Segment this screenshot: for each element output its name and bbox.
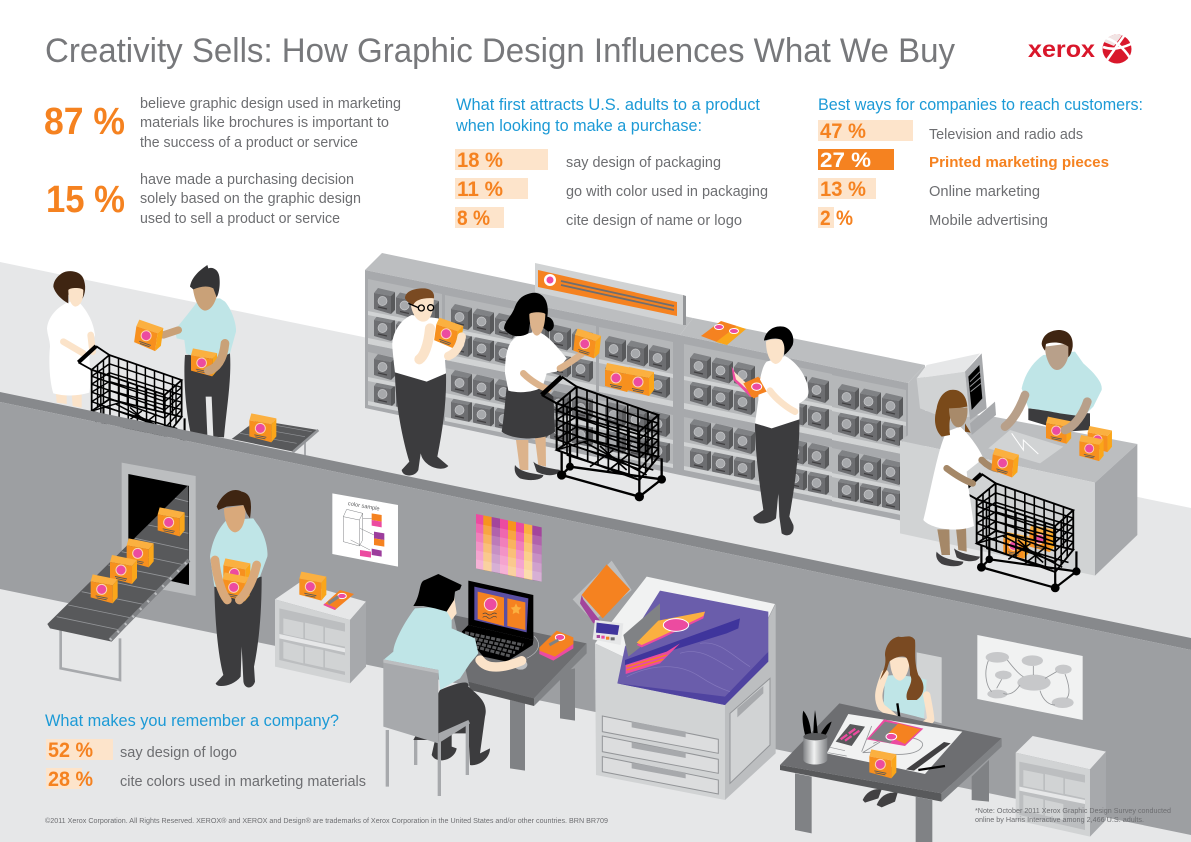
panel: best ways to reach customers: Television and radio ads [929,127,1083,143]
scene: shelf shoppers [392,288,768,501]
scene: production line [47,463,398,687]
panel: what first attracts: say design of packaging [566,155,721,171]
cabinet with box [275,572,366,683]
person: woman with black hair [502,293,602,480]
person: designer at laptop [383,574,522,765]
stat: 15 percent: solely based on the graphic design [140,191,361,207]
panel: best ways to reach customers: 27 % [820,149,871,172]
checkout scene [743,326,1137,592]
person: woman in white [47,271,95,408]
panel: best ways to reach customers: 47 % [820,120,866,143]
scene: designer and printer [383,514,776,800]
stat: 87 percent [44,96,401,151]
poster: color sample: color sample [347,501,380,513]
brochure held by man [732,367,768,398]
person: man carrying boxes [210,490,268,687]
panel: best ways to reach customers: Mobile advertising [929,213,1048,229]
conveyor belt [47,485,189,680]
stat: 87 percent: materials like brochures is important to [140,115,389,131]
panel: what makes you remember [45,711,366,791]
color swatch chart [476,514,542,582]
orange boxes on shelf [605,363,654,396]
person: illustrator [863,636,931,807]
panel: what first attracts: go with color used in packaging [566,184,768,200]
stat: 87 percent: believe graphic design used in marketing [140,96,401,112]
stat: 15 percent [46,172,361,227]
person: cashier [1005,330,1112,461]
survey note: *Note: October 2011 Xerox Graphic Design Survey conducted [975,806,1171,815]
stat: 87 percent: the success of a product or service [140,135,358,151]
doorway [122,463,196,596]
logo: xerox: xerox [1028,36,1095,62]
shelf unit: right [680,318,925,522]
checkout counter [900,410,1137,576]
poster: color sample [332,493,398,567]
person: man reading brochure [743,326,808,535]
panel: what makes you remember: 52 % [48,739,93,762]
lower floor [0,589,1191,842]
lower wall [0,402,1191,842]
drawing desk [780,703,1002,842]
register monitor [917,353,996,435]
panel: best ways to reach customers: 2 % [820,207,853,230]
copyright footer: ©2011 Xerox Corporation. All Rights Reserved. XEROX® and XEROX and Design® are trademarks of Xerox Corporation in the United States and/or other countries. BRN BR709 [45,816,608,825]
shopping cart [962,474,1081,592]
panel: what first attracts: cite design of name or logo [566,213,742,229]
chair [383,659,470,796]
chair back [917,652,942,723]
panel: best ways to reach customers: 13 % [820,178,866,201]
panel: what first attracts: when looking to make a purchase: [455,116,702,135]
panel: what makes you remember: What makes you remember a company? [45,711,339,730]
lower wall band [0,392,1191,650]
panel: best ways to reach customers: Printed marketing pieces [929,155,1109,171]
stat: 15 percent: 15 % [46,179,125,221]
panel: what first attracts: 11 % [457,178,503,201]
scene: illustrator desk [780,635,1106,842]
panel: what first attracts: What first attracts U.S. adults to a product [456,95,760,114]
stat: 87 percent: 87 % [44,101,125,143]
survey note: online by Harris Interactive among 2,466 U.S. adults. [975,815,1144,824]
product sign [535,263,686,325]
person: woman at checkout [923,390,1019,566]
brochures on shelf [701,321,746,345]
scene: upper left shoppers [47,265,318,456]
panel: what makes you remember: say design of logo [120,745,237,761]
shopping cart [78,346,188,456]
upper floor [0,262,1191,642]
shopping cart [542,377,666,501]
panel: what makes you remember: 28 % [48,768,93,791]
panel: what makes you remember: cite colors used in marketing materials [120,774,366,790]
person: man with boxes [133,265,236,437]
logo: xerox [1028,34,1132,64]
stat: 15 percent: have made a purchasing decision [140,172,354,188]
pencil cup [803,710,832,764]
panel: best ways to reach customers [818,95,1143,230]
desk with laptop [453,581,587,771]
printer [573,561,776,800]
person: man with glasses [392,288,464,475]
poster: mind map [977,635,1083,720]
survey note [975,806,1171,824]
panel: what first attracts: 18 % [457,149,503,172]
cabinet [1016,736,1106,837]
conveyor: small [232,413,318,456]
panel: what first attracts: 8 % [457,207,490,230]
boxes in cart [1003,525,1055,559]
panel: best ways to reach customers: Best ways for companies to reach customers: [818,95,1143,114]
panel: what first attracts [455,95,768,230]
shelf unit: left [365,253,693,475]
title: Creativity Sells: How Graphic Design Influences What We Buy [45,32,955,70]
panel: best ways to reach customers: Online marketing [929,184,1040,200]
stat: 15 percent: used to sell a product or service [140,211,340,227]
